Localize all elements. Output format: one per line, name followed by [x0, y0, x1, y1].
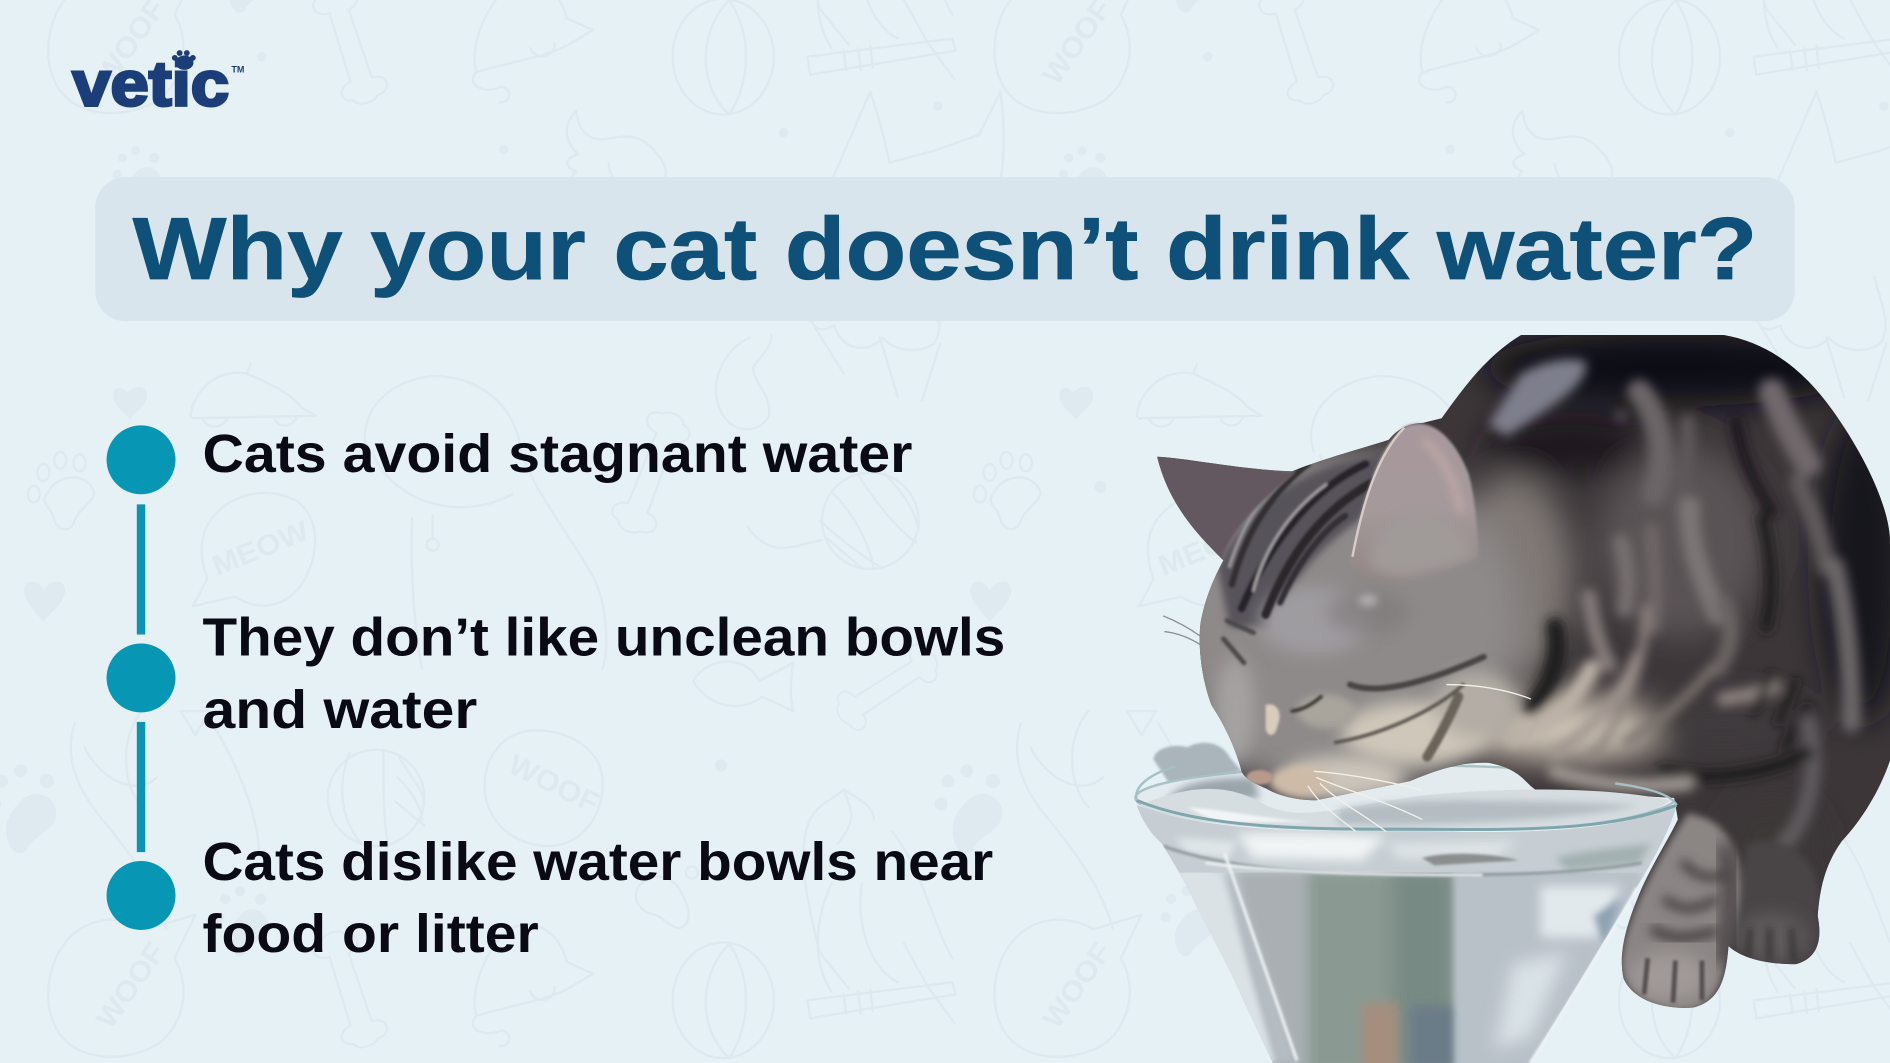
forehead and face stripes	[1223, 464, 1484, 757]
bullet 3	[107, 861, 176, 930]
bowl back rim	[1135, 743, 1675, 830]
bowl body	[1133, 795, 1688, 1063]
point 3 text: food or litter	[202, 904, 539, 964]
body tabby streaks	[1513, 392, 1851, 844]
connector line 2	[137, 722, 145, 852]
bowl rim	[1137, 800, 1677, 829]
muzzle and nose	[1246, 704, 1333, 797]
right ear	[1350, 424, 1478, 583]
photo: cat drinking from a glass bowl	[1133, 325, 1890, 1063]
cat	[1133, 325, 1890, 1024]
logo: vetic	[72, 49, 244, 119]
trademark: TM	[231, 64, 244, 74]
point 2 text	[202, 608, 1005, 740]
left ear	[1155, 456, 1296, 564]
point 2 text: They don’t like unclean bowls	[202, 608, 1005, 668]
logo wordmark: vetic	[72, 49, 229, 119]
water surface and bowl	[1133, 767, 1688, 1063]
timeline list	[107, 424, 1005, 964]
hind leg and paw	[1726, 841, 1821, 967]
point 1 text: Cats avoid stagnant water	[202, 424, 913, 484]
point 3 text	[202, 832, 993, 964]
title band	[95, 177, 1795, 321]
whiskers	[1163, 616, 1531, 832]
point 2 text: and water	[202, 680, 477, 740]
title: Why your cat doesn’t drink water?	[133, 199, 1757, 298]
head	[1169, 448, 1519, 801]
icon: paw on logo	[172, 50, 196, 70]
connector line 1	[137, 504, 145, 635]
bullet 2	[107, 643, 176, 712]
bullet 1	[107, 425, 176, 494]
front leg and paw	[1621, 814, 1740, 1011]
point 3 text: Cats dislike water bowls near	[202, 832, 993, 892]
